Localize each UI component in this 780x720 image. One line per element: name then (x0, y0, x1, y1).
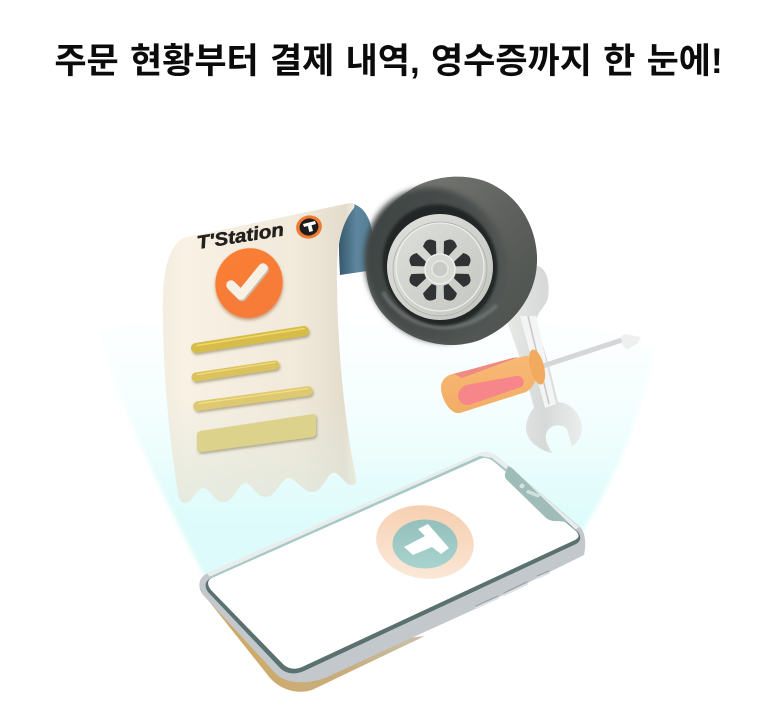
tire sidewall (339, 164, 533, 366)
handle grip (458, 376, 524, 405)
rim windows (407, 237, 473, 303)
rim (387, 214, 493, 320)
notch (505, 466, 576, 530)
app logo disc (392, 520, 458, 568)
notch speaker (526, 490, 540, 498)
wheel (339, 164, 537, 366)
collar (526, 348, 548, 386)
screwdriver (441, 334, 641, 413)
handle (441, 356, 536, 413)
side buttons (476, 571, 549, 608)
text bar 1 (196, 328, 304, 348)
logo badge (293, 213, 325, 241)
hub (425, 254, 455, 284)
receipt (163, 203, 356, 503)
title: 주문 현황부터 결제 내역, 영수증까지 한 눈에! (54, 42, 723, 81)
notch camera (520, 484, 524, 488)
app logo T (404, 524, 449, 555)
sidewall highlight (383, 292, 497, 327)
receipt back fold (339, 203, 374, 275)
phone screen (208, 458, 579, 669)
text bar 2 (196, 362, 275, 377)
wrench (506, 266, 582, 453)
logo: T'Station: T'Station (195, 219, 285, 254)
phone (199, 452, 585, 692)
receipt paper (163, 203, 356, 503)
phone frame (199, 452, 585, 682)
check badge (206, 239, 292, 327)
app logo ring (371, 499, 479, 585)
phone teal top band (209, 456, 520, 582)
light beam (98, 310, 655, 577)
tip (621, 334, 641, 350)
text block (197, 414, 316, 452)
phone gold edge (200, 575, 425, 692)
check mark (232, 270, 264, 296)
phone bezel (206, 458, 580, 673)
tire tread (366, 177, 537, 345)
shaft (540, 340, 622, 367)
text bar 3 (198, 388, 308, 406)
